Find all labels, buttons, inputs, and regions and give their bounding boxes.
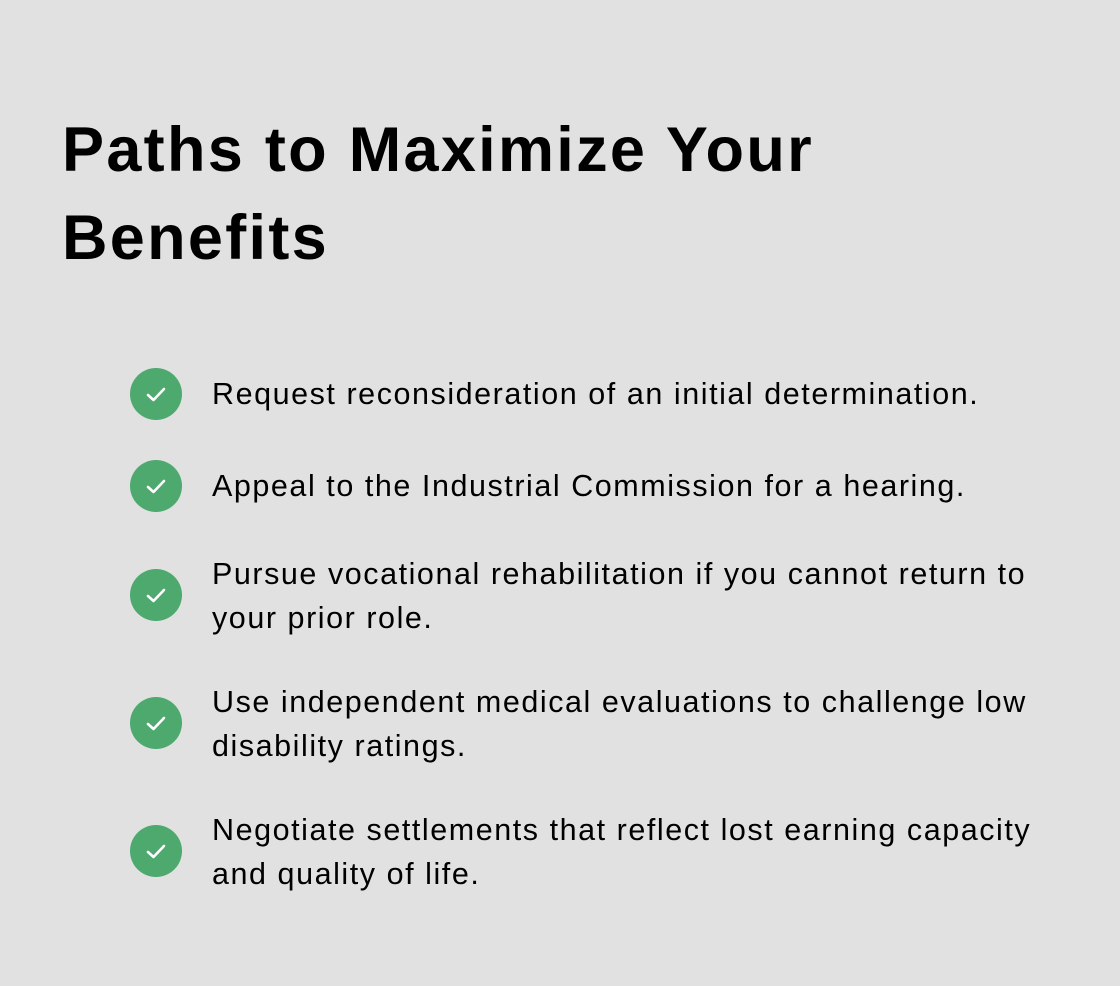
text: your prior role. — [212, 601, 433, 635]
item 1 — [130, 368, 979, 420]
title: Paths to Maximize Your — [62, 115, 814, 185]
icon: check — [130, 460, 182, 512]
text: Use independent medical evaluations to challenge low — [212, 685, 1027, 719]
item 4 — [130, 685, 1027, 763]
text: disability ratings. — [212, 729, 467, 763]
item 3 — [130, 557, 1026, 635]
text: Request reconsideration of an initial determination. — [212, 377, 979, 411]
title: Benefits — [62, 203, 329, 273]
icon: check — [130, 697, 182, 749]
title — [62, 115, 814, 273]
icon: check — [130, 569, 182, 621]
text: and quality of life. — [212, 857, 480, 891]
text: Appeal to the Industrial Commission for a hearing. — [212, 469, 966, 503]
text: Pursue vocational rehabilitation if you cannot return to — [212, 557, 1026, 591]
item 5 — [130, 813, 1031, 891]
text — [212, 685, 1027, 763]
text — [212, 557, 1026, 635]
item 2 — [130, 460, 966, 512]
text: Negotiate settlements that reflect lost earning capacity — [212, 813, 1031, 847]
icon: check — [130, 825, 182, 877]
text — [212, 813, 1031, 891]
icon: check — [130, 368, 182, 420]
